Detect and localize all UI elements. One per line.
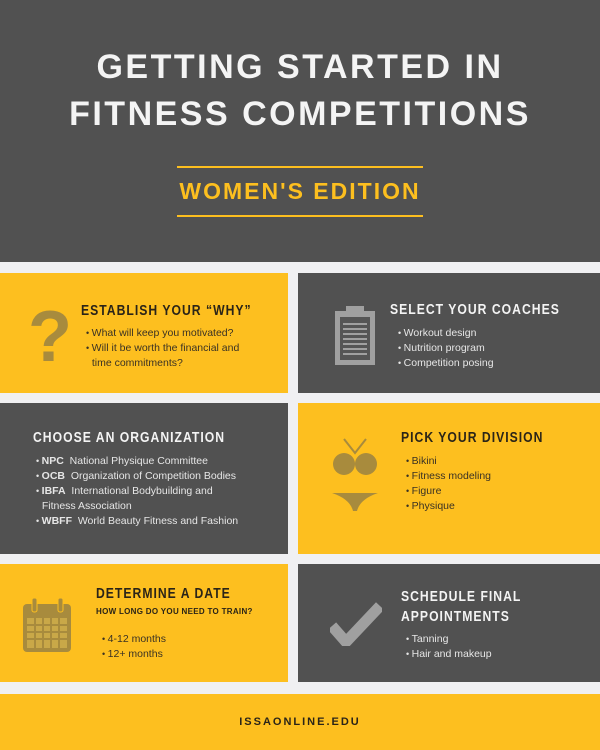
panel: organization: Fitness Association bbox=[42, 500, 132, 512]
panel: division: Fitness modeling bbox=[412, 470, 491, 482]
panel: organization: OCB Organization of Competition Bodies bbox=[42, 470, 236, 482]
title bbox=[69, 48, 531, 133]
panel: coaches: Nutrition program bbox=[404, 342, 485, 354]
panel: division: Physique bbox=[412, 500, 455, 512]
panel: why bbox=[0, 273, 288, 393]
panel: division: Bikini bbox=[412, 455, 437, 467]
panel: organization: IBFA International Bodybuilding and bbox=[42, 485, 213, 497]
panel: coaches: Workout design bbox=[404, 327, 476, 339]
title: FITNESS COMPETITIONS bbox=[69, 95, 531, 133]
panel: date: HOW LONG DO YOU NEED TO TRAIN? bbox=[96, 607, 253, 616]
icon: checkmark bbox=[330, 602, 382, 646]
panel: appointments: APPOINTMENTS bbox=[401, 609, 510, 625]
panel: date: DETERMINE A DATE bbox=[96, 586, 231, 602]
panel: date bbox=[0, 564, 288, 682]
panel: division bbox=[298, 403, 600, 554]
footer: ISSAONLINE.EDU bbox=[239, 716, 361, 728]
panel: organization: WBFF World Beauty Fitness and Fashion bbox=[42, 515, 238, 527]
panel: date: 4-12 months bbox=[108, 633, 166, 645]
panel: why: ESTABLISH YOUR “WHY” bbox=[81, 303, 252, 319]
panel: why: time commitments? bbox=[92, 357, 183, 369]
footer bbox=[0, 694, 600, 750]
panel: why: What will keep you motivated? bbox=[92, 327, 233, 339]
icon: question mark: ? bbox=[28, 297, 72, 377]
icon: calendar bbox=[23, 598, 71, 652]
panel: organization: NPC National Physique Committee bbox=[42, 455, 208, 467]
panel: organization bbox=[0, 403, 288, 554]
panel: division: Figure bbox=[412, 485, 441, 497]
panel: coaches: SELECT YOUR COACHES bbox=[390, 302, 560, 318]
icon: clipboard bbox=[335, 306, 375, 365]
panel: division: PICK YOUR DIVISION bbox=[401, 430, 543, 446]
panel: appointments: SCHEDULE FINAL bbox=[401, 589, 521, 605]
subtitle: WOMEN'S EDITION bbox=[179, 178, 421, 204]
panel: date: 12+ months bbox=[108, 648, 163, 660]
subtitle bbox=[177, 166, 423, 217]
panel: appointments: Hair and makeup bbox=[412, 648, 492, 660]
title: GETTING STARTED IN bbox=[96, 48, 504, 86]
panel: appointments bbox=[298, 564, 600, 682]
panel: coaches: Competition posing bbox=[404, 357, 494, 369]
panel: organization: CHOOSE AN ORGANIZATION bbox=[33, 430, 225, 446]
icon: bikini bbox=[332, 438, 378, 511]
panel: coaches bbox=[298, 273, 600, 393]
panel: why: Will it be worth the financial and bbox=[92, 342, 239, 354]
header bbox=[0, 0, 600, 262]
panel: appointments: Tanning bbox=[412, 633, 448, 645]
